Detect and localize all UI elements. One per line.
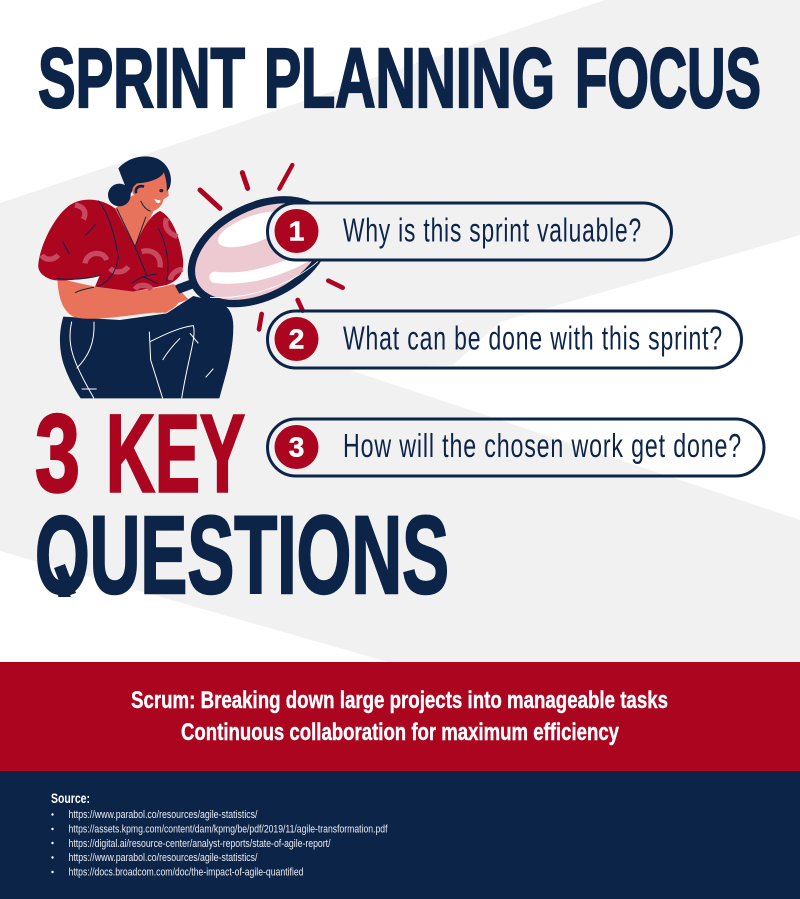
heading: 3 key bbox=[35, 392, 245, 516]
lens rim line bbox=[210, 255, 325, 298]
blouse lines bbox=[57, 201, 168, 293]
smile bbox=[154, 199, 161, 203]
footer: sources: Source: bbox=[51, 790, 90, 806]
footer: sources bbox=[0, 771, 800, 899]
blouse pattern bbox=[42, 205, 183, 289]
lens highlights bbox=[214, 204, 293, 255]
bun bbox=[108, 184, 131, 206]
magnifier lens bbox=[174, 179, 345, 325]
question 3 bbox=[268, 419, 764, 476]
footer: sources: https://docs.broadcom.com/doc/the-impact-of-agile-quantified bbox=[68, 866, 304, 878]
illustration: woman with magnifying glass bbox=[38, 156, 345, 398]
hair bbox=[118, 156, 171, 195]
heading: questions bbox=[37, 514, 448, 597]
question 1: 1 bbox=[289, 216, 304, 246]
neck bbox=[115, 195, 153, 248]
title bbox=[38, 31, 761, 125]
footer: sources: https://assets.kpmg.com/content/dam/kpmg/be/pdf/2019/11/agile-transformation.pdf bbox=[68, 824, 388, 836]
title: SPRINT bbox=[38, 31, 245, 125]
handle bbox=[178, 282, 198, 289]
footer: sources: https://www.parabol.co/resources/agile-statistics/ bbox=[68, 809, 258, 821]
banner: scrum summary bbox=[0, 662, 800, 771]
ear bbox=[132, 184, 146, 198]
question 2: 2 bbox=[289, 324, 304, 354]
footer: sources: https://digital.ai/resource-center/analyst-reports/state-of-agile-report/ bbox=[68, 838, 331, 850]
heading: 3 key: 3 bbox=[35, 392, 80, 516]
question 1 bbox=[268, 203, 672, 260]
footer: sources: https://www.parabol.co/resources/agile-statistics/ bbox=[68, 852, 258, 864]
leg detail lines bbox=[70, 322, 213, 398]
heading: 3 key: KEY bbox=[106, 392, 245, 516]
title: PLANNING bbox=[264, 31, 555, 125]
legs bbox=[60, 296, 233, 398]
banner: scrum summary: Continuous collaboration for maximum efficiency bbox=[181, 719, 620, 746]
eye bbox=[159, 189, 163, 192]
banner: scrum summary: Scrum: Breaking down large projects into manageable tasks bbox=[131, 687, 668, 714]
face bbox=[133, 170, 169, 212]
question 2 bbox=[268, 311, 742, 368]
hand bbox=[153, 284, 188, 313]
blouse bbox=[38, 200, 183, 292]
question 1: Why is this sprint valuable? bbox=[343, 212, 642, 248]
rays bbox=[200, 165, 343, 329]
heading: questions: QUESTIONS bbox=[35, 494, 449, 617]
arm bbox=[57, 278, 188, 319]
question 3: 3 bbox=[289, 432, 304, 462]
